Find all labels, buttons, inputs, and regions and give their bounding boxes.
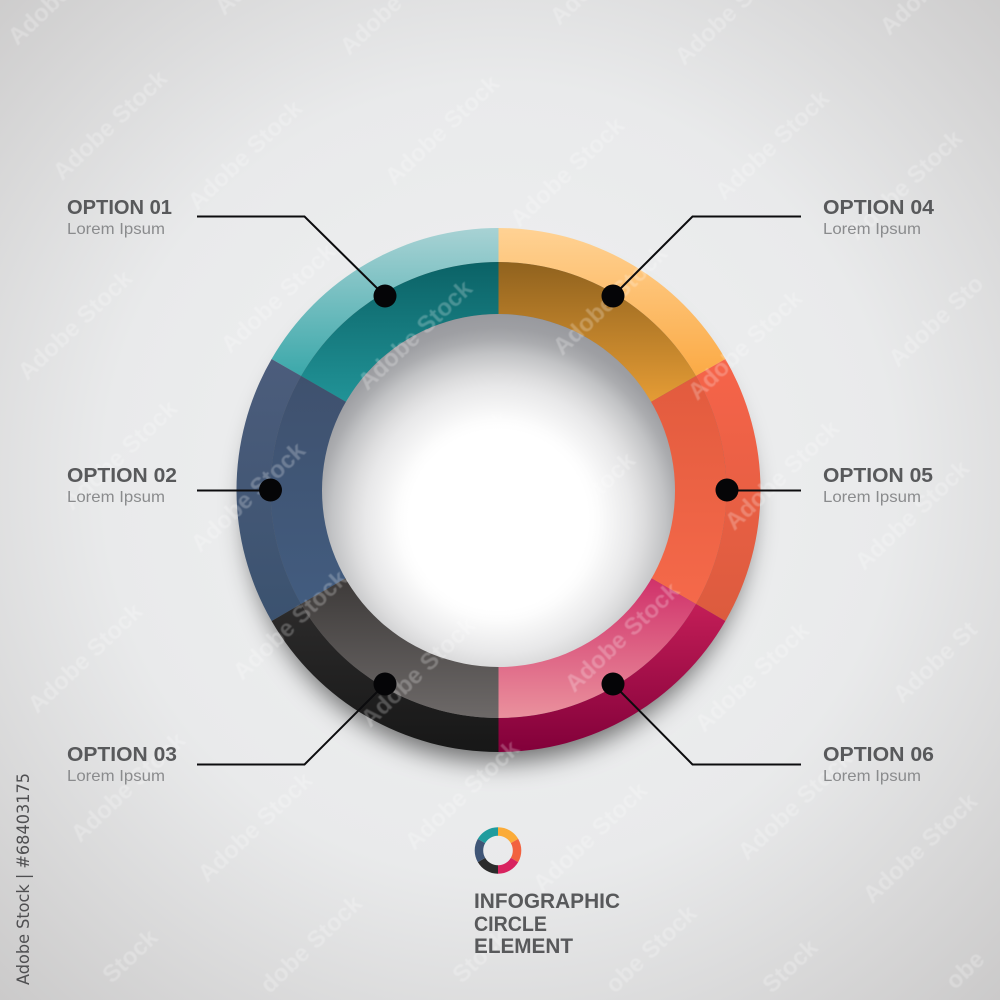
leader line 01	[197, 216, 385, 296]
title: infographic circle element: CIRCLE	[474, 913, 547, 936]
callout: option 03	[67, 672, 396, 785]
watermark: Adobe Stock	[733, 745, 858, 866]
leader line 05	[727, 490, 801, 492]
watermark: Adobe Stock	[216, 238, 341, 359]
segment: black option 03	[272, 578, 498, 752]
text 05: Lorem Ipsum	[823, 489, 921, 506]
watermark: Adobe Stock	[505, 112, 630, 233]
watermark: Stock	[757, 934, 824, 999]
watermark: Adobe Stock	[228, 565, 353, 686]
title: infographic circle element: INFOGRAPHIC	[474, 890, 620, 913]
watermark: Adobe Stock	[560, 577, 685, 698]
title: infographic circle element	[474, 890, 620, 958]
donut ring chart	[236, 228, 761, 752]
watermark: obe Stock	[600, 900, 703, 999]
segment: pink option 06	[498, 578, 725, 752]
watermark: Adobe Stock	[183, 95, 308, 216]
leader line 02	[197, 490, 271, 492]
watermark: Adobe Stock	[353, 275, 478, 396]
watermark: Adobe Stock	[13, 265, 138, 386]
icon: small ring logo	[479, 831, 517, 870]
marker dot 04	[602, 284, 624, 308]
text 01: Lorem Ipsum	[67, 221, 165, 238]
watermark: Adobe Sto	[884, 270, 989, 372]
text 04: Lorem Ipsum	[823, 221, 921, 238]
marker dot 03	[374, 672, 396, 696]
watermark: Adobe Stock	[186, 437, 311, 558]
watermark: Adobe Stock	[843, 125, 968, 246]
text 02: Lorem Ipsum	[67, 489, 165, 506]
segment: orange option 04	[498, 228, 725, 402]
watermark: Adobe Stock	[720, 415, 845, 536]
marker dot 05	[716, 478, 738, 502]
watermark: obe	[941, 946, 990, 995]
watermark: Adobe Stock	[193, 767, 318, 888]
marker dot 01	[374, 284, 396, 308]
watermark: Adobe Stock	[58, 395, 183, 516]
heading 04: OPTION 04	[823, 197, 935, 219]
watermark: Adobe Stock	[516, 447, 641, 568]
watermark: Adobe Stock	[683, 285, 808, 406]
heading 06: OPTION 06	[823, 744, 934, 766]
segment: teal option 01	[272, 228, 498, 402]
watermark: Stock	[97, 924, 164, 989]
side stock id text: Adobe Stock | #68403175	[14, 773, 34, 985]
callout: option 06	[602, 672, 934, 785]
watermark: dobe Stock	[255, 890, 368, 999]
title: infographic circle element: ELEMENT	[474, 935, 573, 958]
callout: option 04	[602, 197, 935, 308]
watermark: Adobe Stock	[66, 727, 191, 848]
segment: navy option 02	[236, 359, 346, 621]
text 06: Lorem Ipsum	[823, 768, 921, 785]
ring drop shadow	[246, 258, 750, 762]
watermark: Adobe St	[888, 616, 983, 708]
leader line 04	[613, 216, 801, 296]
marker dot 06	[602, 672, 624, 696]
watermark: Adobe Stock	[710, 85, 835, 206]
watermark: Adobe Stock	[390, 405, 515, 526]
callout: option 02	[67, 465, 282, 506]
watermark: Adobe Stock	[858, 788, 983, 909]
leader line 06	[613, 684, 801, 764]
watermark: Adobe Stock	[48, 65, 173, 186]
callout: option 05	[716, 465, 933, 506]
watermark: Adobe Stock	[690, 617, 815, 738]
heading 05: OPTION 05	[823, 465, 933, 487]
watermark: Adobe Stock	[850, 455, 975, 576]
watermark: Adobe Stock	[380, 70, 505, 191]
segment: red option 05	[651, 359, 761, 621]
leader line 03	[197, 684, 385, 764]
watermark: Stock	[447, 924, 514, 989]
centre white disc with inner shadow	[322, 314, 675, 667]
watermark: Adobe Stock	[548, 240, 673, 361]
heading 02: OPTION 02	[67, 465, 177, 487]
watermark: Adobe Stock	[23, 598, 148, 719]
watermark: Adobe Stock	[400, 735, 525, 856]
marker dot 02	[259, 478, 282, 502]
heading 03: OPTION 03	[67, 744, 177, 766]
text 03: Lorem Ipsum	[67, 768, 165, 785]
heading 01: OPTION 01	[67, 197, 172, 219]
callout: option 01	[67, 197, 396, 308]
watermark: Adobe Stock	[528, 777, 653, 898]
watermark: Adobe Stock	[356, 612, 481, 733]
